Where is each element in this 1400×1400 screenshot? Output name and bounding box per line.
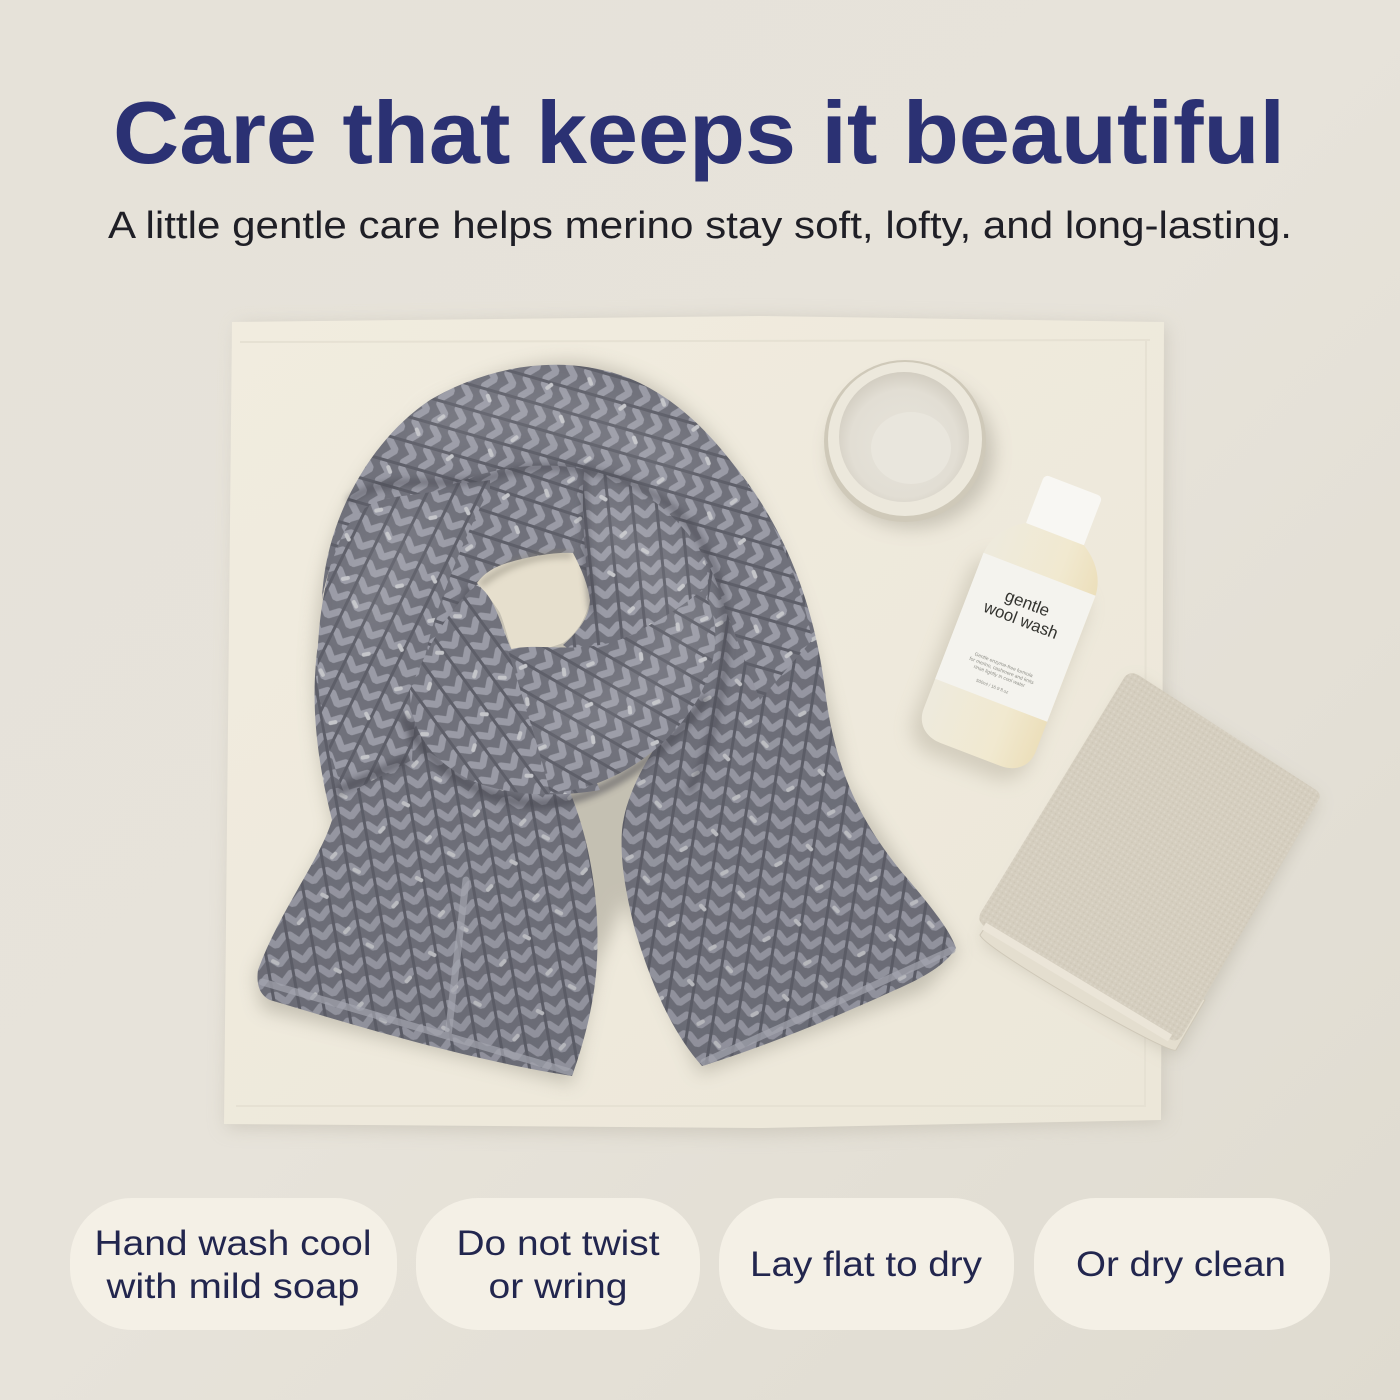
pill: hand wash: with mild soap <box>105 1267 359 1306</box>
scarf fold shadow: top band <box>350 467 726 790</box>
pill: dry clean: Or dry clean <box>1076 1245 1286 1284</box>
scarf loop: front right <box>508 590 715 793</box>
bottle label: rinse lightly in cool water <box>973 664 1026 689</box>
scarf loop: front left <box>410 585 600 794</box>
scarf tail: left <box>258 620 598 1076</box>
pill: hand wash: Hand wash cool <box>94 1224 372 1263</box>
scarf knot underlay <box>400 450 620 700</box>
bottle label: 500ml / 16.9 fl.oz <box>975 678 1010 695</box>
pill: do not twist: Do not twist <box>456 1224 660 1263</box>
bottle label: Gentle enzyme-free formula <box>973 651 1034 679</box>
bottle cap <box>1025 474 1103 549</box>
bottle <box>904 462 1130 789</box>
bottle label: wool wash <box>980 597 1061 643</box>
pill: lay flat <box>719 1198 1014 1330</box>
title: Care that keeps it beautiful <box>113 83 1285 182</box>
scarf tail ridges <box>262 880 952 1072</box>
subtitle: A little gentle care helps merino stay soft, lofty, and long-lasting. <box>108 205 1292 247</box>
scarf tail: right <box>622 420 956 1066</box>
scarf <box>256 362 958 1084</box>
pill: do not twist: or wring <box>488 1267 628 1306</box>
scarf loop: left band <box>318 480 490 795</box>
scarf highlights <box>370 410 695 720</box>
scarf shadow <box>256 362 958 1084</box>
scarf hole shadow <box>480 555 572 585</box>
bottle body <box>914 513 1111 776</box>
bottle label <box>935 553 1096 722</box>
bottle label: for merino, cashmere and knits <box>968 656 1035 686</box>
scarf loop: top band <box>322 365 812 700</box>
towel <box>979 673 1320 1056</box>
pill: lay flat: Lay flat to dry <box>750 1245 983 1284</box>
pill: do not twist <box>416 1198 700 1330</box>
pill: hand wash <box>70 1198 397 1330</box>
pill: dry clean <box>1034 1198 1330 1330</box>
scarf loop: right inner band <box>563 465 708 665</box>
cloth <box>224 316 1166 1134</box>
scarf hole <box>477 553 590 653</box>
scarf under-knot shadow <box>340 700 705 804</box>
bowl <box>824 360 994 528</box>
scarf loop: back band <box>469 464 602 590</box>
bottle label: gentle <box>1002 586 1052 620</box>
